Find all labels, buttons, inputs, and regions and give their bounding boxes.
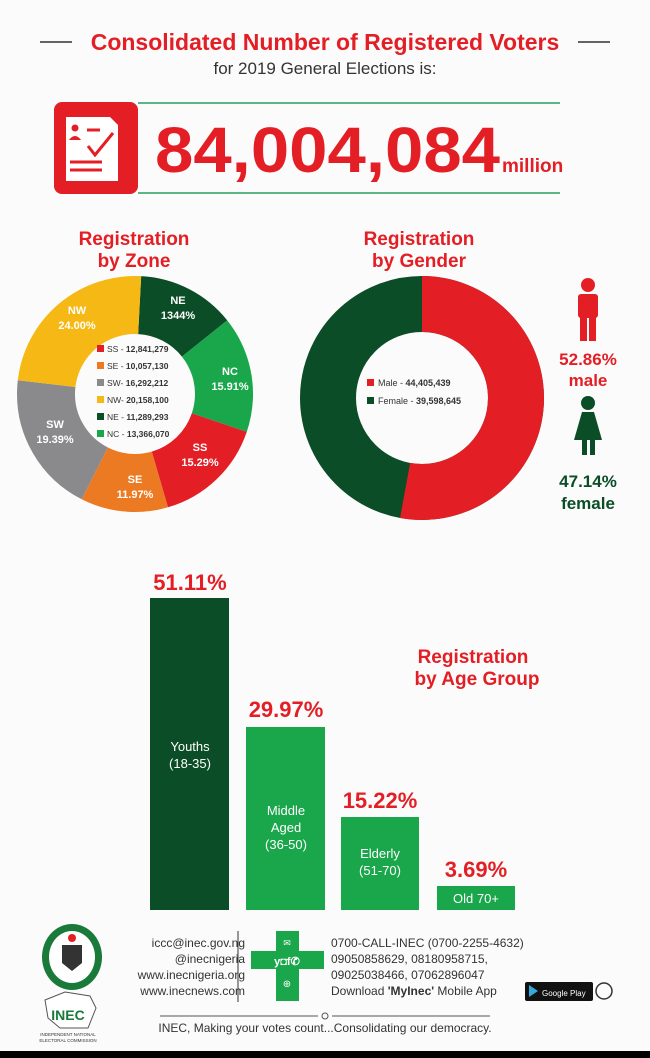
logo: INEC	[39, 924, 102, 1043]
heading: age: Registration	[418, 647, 528, 668]
bar chart: age: Youths	[170, 739, 210, 754]
title: Consolidated Number of Registered Voters	[91, 29, 559, 55]
contacts right	[331, 936, 524, 998]
bar chart: age: Elderly	[360, 846, 400, 861]
heading: zone: by Zone	[98, 251, 170, 272]
icon: google play: Google Play	[542, 989, 586, 998]
bar chart: age: (18-35)	[169, 756, 211, 771]
contacts left: @inecnigeria	[175, 952, 245, 966]
tagline	[158, 1013, 492, 1035]
donut: zone	[36, 295, 249, 501]
title: for 2019 General Elections is:	[213, 59, 437, 78]
title	[40, 29, 610, 78]
bar chart: age: 51.11%	[153, 570, 227, 595]
contacts right: 0700-CALL-INEC (0700-2255-4632)	[331, 936, 524, 950]
donut: gender	[328, 304, 516, 492]
icon: social cross	[238, 931, 324, 1002]
donut: gender: Male - 44,405,439	[378, 378, 451, 388]
contacts right: 09025038466, 07062896047	[331, 968, 485, 982]
legend: zone	[97, 344, 170, 439]
legend: zone: SE - 10,057,130	[107, 361, 169, 371]
bar chart: age: (36-50)	[265, 837, 307, 852]
donut: zone: SS	[193, 442, 207, 454]
heading: age	[415, 647, 539, 690]
contacts left: www.inecnews.com	[139, 984, 245, 998]
icon: ballot document	[54, 102, 138, 194]
icon: social cross: y◘f✆	[274, 956, 300, 968]
bar chart: age: Middle	[267, 803, 305, 818]
heading: zone	[79, 229, 189, 272]
contacts right: 09050858629, 08180958715,	[331, 952, 488, 966]
text: male: male	[569, 371, 607, 390]
donut: zone: NC	[222, 366, 238, 378]
big number	[138, 103, 563, 193]
bar chart: age: 29.97%	[249, 697, 323, 722]
legend: zone: SW- 16,292,212	[107, 378, 169, 388]
text: female	[559, 472, 617, 513]
contacts left: iccc@inec.gov.ng	[152, 936, 245, 950]
donut: zone: 15.29%	[181, 457, 219, 469]
legend: zone: SS - 12,841,279	[107, 344, 169, 354]
tagline: INEC, Making your votes count...Consolidating our democracy.	[158, 1021, 492, 1035]
text: female: female	[561, 494, 615, 513]
bar chart: age: Old 70+	[453, 891, 499, 906]
heading: gender: Registration	[364, 229, 474, 250]
contacts left	[137, 936, 245, 998]
donut: zone: 19.39%	[36, 434, 74, 446]
icon: female	[574, 396, 602, 455]
bar chart: age: (51-70)	[359, 863, 401, 878]
legend: zone: NW- 20,158,100	[107, 395, 169, 405]
icon: social cross: ⊕	[283, 979, 291, 990]
logo: INEC: INEC	[51, 1007, 85, 1023]
icon: male	[578, 278, 598, 341]
donut: gender: Female - 39,598,645	[378, 396, 461, 406]
contacts right: Download 'MyInec' Mobile App	[331, 984, 497, 998]
bar chart: age: 3.69%	[445, 857, 507, 882]
donut: zone: NE	[170, 295, 186, 307]
donut: zone: NW	[68, 305, 87, 317]
icon: social cross: ✉	[283, 938, 291, 948]
legend: zone: NC - 13,366,070	[107, 429, 170, 439]
logo: INEC: ELECTORAL COMMISSION	[39, 1038, 97, 1043]
big number: 84,004,084	[155, 114, 500, 186]
text: female: 47.14%	[559, 472, 617, 491]
heading: age: by Age Group	[415, 669, 539, 690]
donut: zone: 1344%	[161, 310, 195, 322]
bar chart: age: 15.22%	[343, 788, 417, 813]
heading: gender	[364, 229, 474, 272]
donut: zone: SE	[128, 474, 142, 486]
heading: gender: by Gender	[372, 251, 467, 272]
donut: zone: SW	[46, 419, 64, 431]
donut: zone: 11.97%	[117, 489, 154, 501]
contacts left: www.inecnigeria.org	[137, 968, 245, 982]
logo: INEC: INDEPENDENT NATIONAL	[40, 1032, 96, 1037]
big number: million	[502, 156, 563, 177]
bar chart: age: Aged	[271, 820, 301, 835]
legend: zone: NE - 11,289,293	[107, 412, 169, 422]
heading: zone: Registration	[79, 229, 189, 250]
icon: google play	[525, 982, 612, 1001]
text: male: 52.86%	[559, 350, 617, 369]
text: male	[559, 350, 617, 390]
donut: zone: 15.91%	[211, 381, 249, 393]
bar chart: age	[150, 570, 515, 910]
donut: zone: 24.00%	[58, 320, 96, 332]
